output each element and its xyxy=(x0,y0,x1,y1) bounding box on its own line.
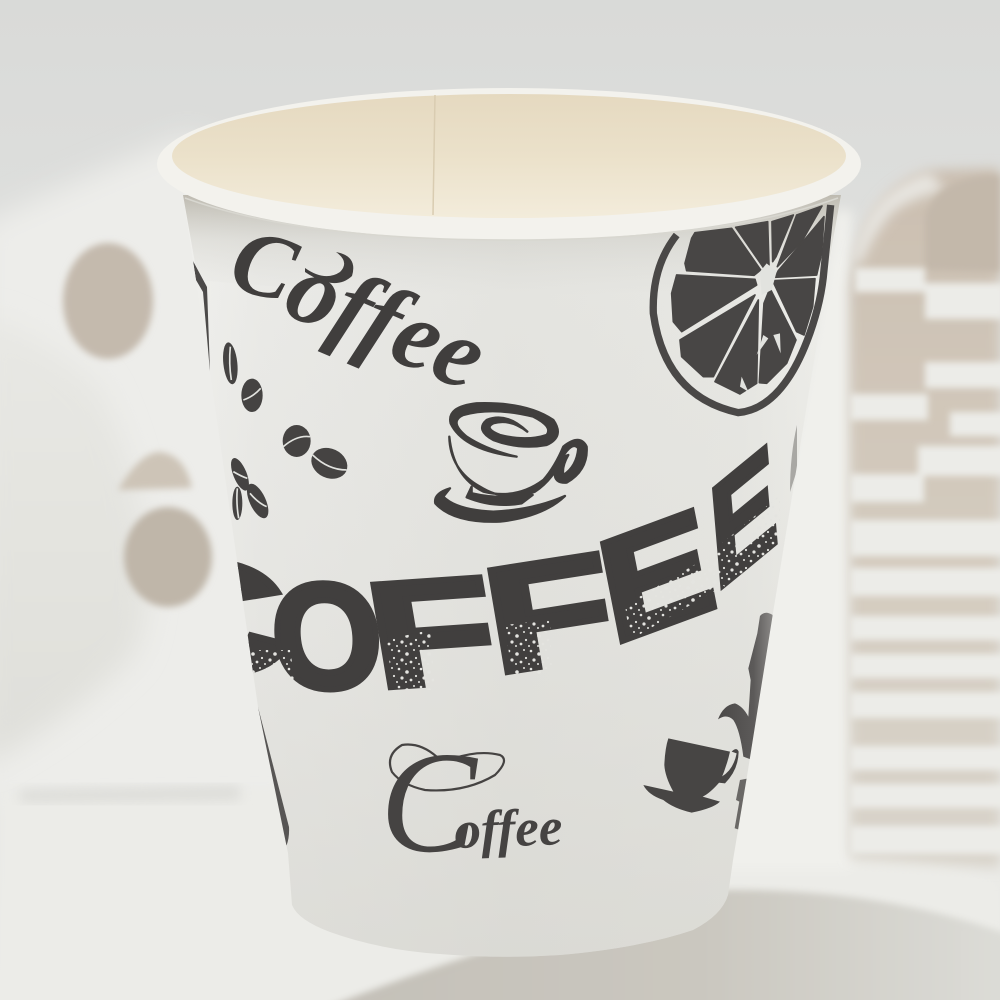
interior seam xyxy=(433,95,435,215)
blurred background shapes on the left xyxy=(0,135,300,800)
white glow beside cup xyxy=(700,210,852,870)
cup artwork xyxy=(97,205,831,883)
cup interior xyxy=(172,94,846,218)
script word: Coffee upper xyxy=(234,236,481,385)
heavy word: COFFEE: F xyxy=(356,546,509,720)
heavy word: COFFEE: E xyxy=(587,477,726,675)
cup xyxy=(97,88,861,957)
heavy word: COFFEE: C xyxy=(97,524,300,709)
script word: Coffee lower: C xyxy=(380,723,479,883)
cup body xyxy=(183,195,841,957)
partial icon, upper left edge xyxy=(193,261,210,372)
heavy word: COFFEE: E xyxy=(705,413,782,623)
script word: Coffee upper: offee xyxy=(271,230,502,412)
rim lower edge xyxy=(185,198,838,240)
heavy word: COFFEE: F xyxy=(472,521,626,706)
icon: cup and saucer xyxy=(643,738,739,813)
stack of cups, right background xyxy=(850,168,1000,868)
icon: steaming coffee cup xyxy=(435,403,587,522)
shadow under rim xyxy=(183,195,841,295)
script word: Coffee upper: C xyxy=(220,207,309,323)
table shadow bottom right xyxy=(320,890,1000,1000)
print grain on COFFEE xyxy=(245,495,780,690)
table surface xyxy=(0,786,1000,1000)
partial icon, right edge xyxy=(790,425,797,492)
script word: Coffee lower: offee xyxy=(453,798,563,860)
cup rim outer xyxy=(157,88,861,240)
partial glyph near right edge xyxy=(734,778,746,830)
icon: lemon slice xyxy=(653,205,831,413)
swash on the C xyxy=(390,744,504,790)
icon: teapot xyxy=(718,613,773,759)
partial icon, lower left edge xyxy=(258,707,289,856)
swash above the o xyxy=(305,252,353,283)
icon: coffee beans xyxy=(221,342,352,521)
cup body lower shading xyxy=(183,195,841,957)
script word: Coffee lower xyxy=(388,743,561,858)
heavy word: COFFEE: O xyxy=(266,553,388,720)
heavy word: COFFEE xyxy=(237,442,778,692)
